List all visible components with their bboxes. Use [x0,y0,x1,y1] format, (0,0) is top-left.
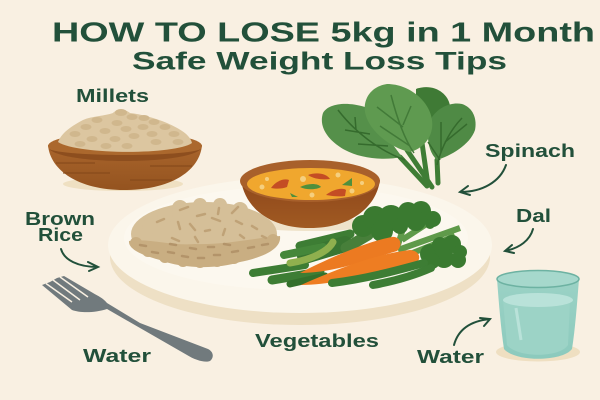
water glass [496,270,580,362]
spinach [322,84,476,187]
dal soup [247,168,375,200]
right leaf [428,104,476,160]
center leaf [365,84,432,152]
right green beans [332,263,431,285]
fork [42,276,213,362]
label: Brown Rice: Rice [38,225,83,245]
carrots [300,237,400,273]
label: Brown Rice [25,209,95,245]
arrow: Dal [505,229,533,253]
label: Brown Rice: Brown [25,209,95,229]
label: Spinach: Spinach [485,141,575,161]
subtitle: Safe Weight Loss Tips [132,48,507,76]
label: Water right: Water [417,347,484,367]
left bean cluster [253,234,368,284]
left leaf [322,104,402,159]
rice lumps edge [142,198,263,234]
label: Water left: Water [83,346,151,366]
broccoli stalks [398,222,460,256]
broccoli right [420,235,467,269]
millet mound [58,109,192,152]
millets bowl [48,109,202,191]
arrow: Brown Rice [61,249,98,271]
vegetables [253,201,467,285]
back dark leaf [416,87,450,140]
broccoli top [352,201,441,242]
plate [108,177,492,325]
label: Millets: Millets [76,86,149,106]
arrow: Spinach [460,165,506,195]
brown rice [129,198,280,268]
label: Dal: Dal [516,206,551,226]
stems [400,143,438,187]
arrow: Water [454,318,490,345]
label: Vegetables: Vegetables [255,331,379,351]
dal bowl [240,160,380,231]
title: HOW TO LOSE 5kg in 1 Month [52,16,595,48]
